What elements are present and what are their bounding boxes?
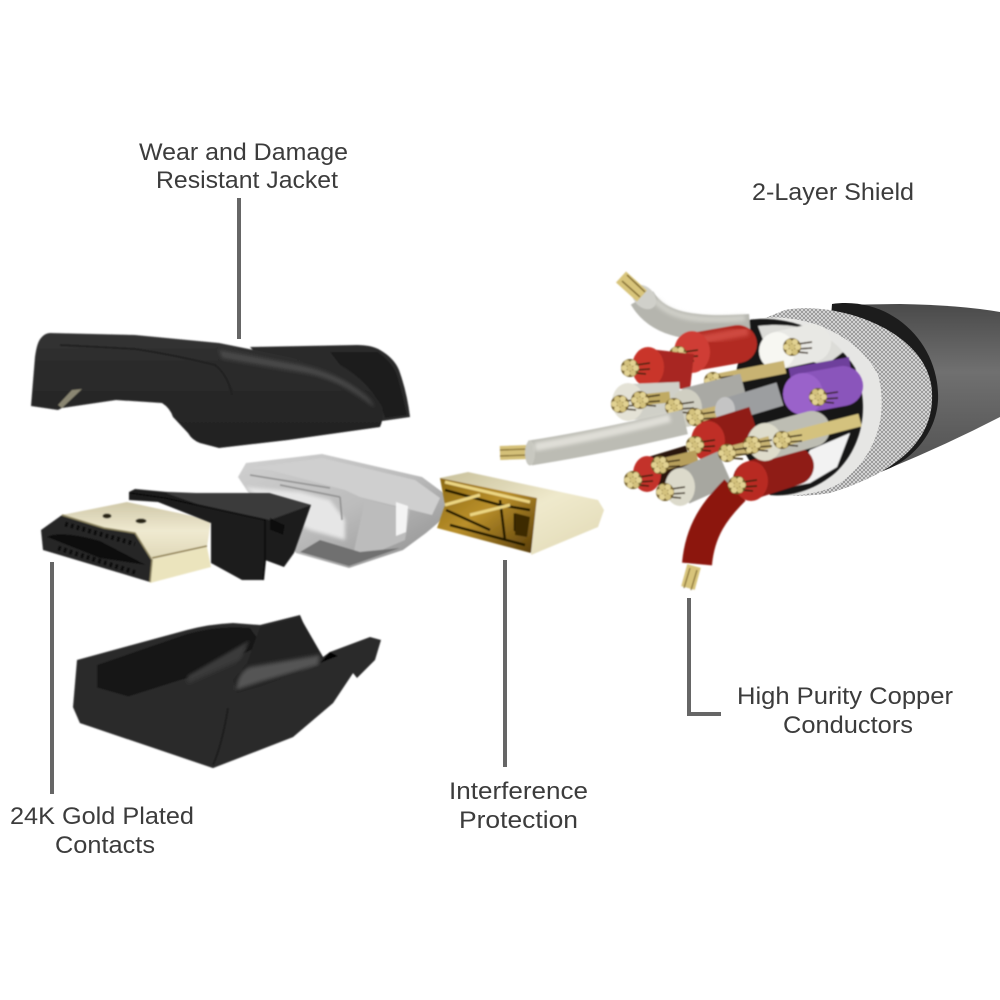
label: 2-Layer Shield: 2-Layer Shield [752, 179, 914, 206]
label: Wear and Damage Resistant Jacket [139, 139, 348, 194]
wire: purple cables [783, 364, 850, 415]
wire: red centre [686, 421, 755, 461]
label: High Purity Copper Conductors: High Purity Copper [737, 683, 953, 710]
wire: dark red ribbon with tip [684, 490, 735, 590]
wire: red upper left [621, 347, 692, 387]
copper strands upper [713, 367, 785, 381]
wire: gray lower [656, 468, 725, 506]
bottom jacket shell [73, 615, 381, 768]
HDMI connector gold shell [62, 502, 211, 583]
leader line: gold contacts [50, 562, 54, 794]
clear inner shell [238, 454, 449, 568]
top jacket shell [31, 333, 410, 448]
cable: upper inner foil [758, 325, 843, 366]
gold interference shield cap [437, 472, 604, 555]
label: 24K Gold Plated Contacts [10, 803, 194, 859]
cable: interior [725, 319, 863, 495]
label: Interference Protection [449, 778, 588, 834]
leader line: copper conductors [689, 598, 721, 714]
wire: white lower crescent [790, 433, 850, 487]
black connector holder [129, 489, 311, 580]
leader line: interference protection [503, 560, 507, 767]
cable: braided shield [760, 308, 932, 496]
HDMI connector black face with pins [41, 515, 152, 582]
cable assembly [500, 275, 863, 590]
wire: red with copper [669, 331, 748, 373]
wire: white cable [759, 332, 812, 370]
wire: top gray with gold tip [621, 275, 750, 328]
label: Interference Protection: Interference [449, 778, 588, 805]
wire: gray front with copper strands [718, 420, 860, 462]
wire: gray left [611, 383, 680, 421]
label: Wear and Damage Resistant Jacket: Wear and Damage [139, 139, 348, 166]
cable: dark ring [820, 303, 938, 474]
cable: outer jacket [832, 304, 1000, 474]
leader line: jacket [237, 198, 241, 339]
wire: silver braided drain [715, 394, 780, 423]
label: Interference Protection: Protection [459, 807, 578, 834]
wire: long gray left with gold tip [500, 418, 685, 466]
label: 24K Gold Plated Contacts: Contacts [55, 832, 155, 859]
wire: gray centre [665, 389, 745, 427]
label: High Purity Copper Conductors: Conductors [783, 712, 913, 739]
label: 24K Gold Plated Contacts: 24K Gold Plated [10, 803, 194, 830]
wire: red front [728, 461, 795, 501]
wire: red lower [624, 456, 697, 492]
label: High Purity Copper Conductors [737, 683, 953, 739]
label: Wear and Damage Resistant Jacket: Resistant Jacket [156, 167, 338, 194]
cable: foil shield [735, 317, 882, 496]
